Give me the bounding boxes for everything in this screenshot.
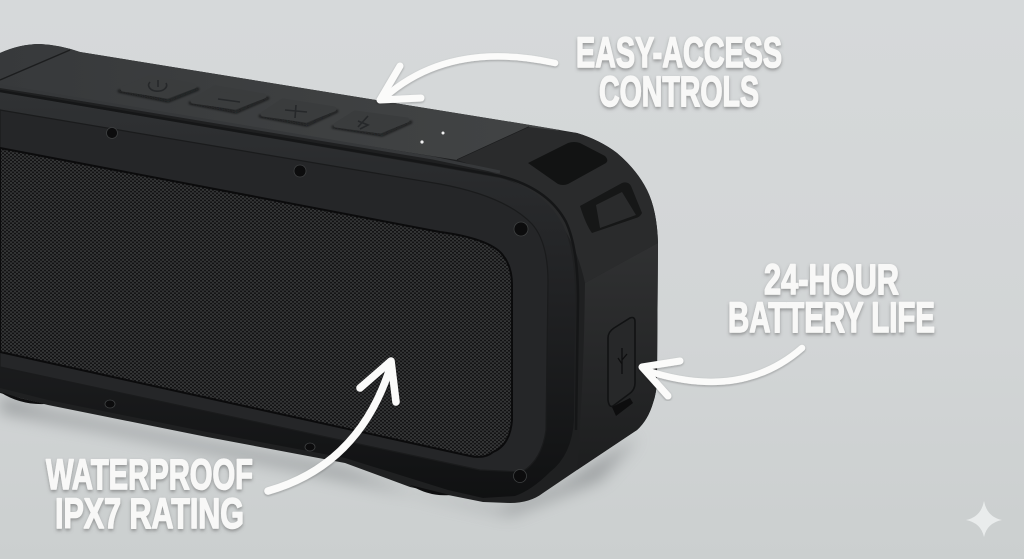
speaker body silhouette bbox=[0, 44, 658, 503]
power button bbox=[123, 78, 194, 96]
front frame bbox=[0, 92, 575, 498]
plus button bbox=[263, 101, 334, 120]
label: easy-access controls: CONTROLS bbox=[599, 68, 759, 116]
label: waterproof IPX7 rating: WATERPROOF bbox=[46, 451, 253, 499]
arrow: battery life bbox=[642, 348, 802, 396]
label: easy-access controls bbox=[576, 29, 782, 116]
right end cap bbox=[457, 127, 658, 283]
USB door tab bbox=[612, 398, 633, 416]
speaker grille bbox=[0, 148, 512, 457]
label: 24-hour battery life bbox=[728, 256, 935, 342]
inner bezel bbox=[0, 110, 548, 472]
icon: sparkle watermark bbox=[966, 501, 1002, 537]
screw bbox=[105, 128, 528, 482]
minus button bbox=[193, 88, 264, 107]
USB symbol bbox=[618, 348, 627, 374]
front ridge strip bbox=[0, 86, 500, 172]
speaker shadow on surface bbox=[0, 395, 640, 515]
top face bbox=[0, 44, 560, 160]
button shadow lines bbox=[119, 89, 411, 135]
top face seams bbox=[0, 50, 529, 160]
label: waterproof IPX7 rating: IPX7 RATING bbox=[55, 490, 244, 538]
handle inner ledge bbox=[596, 192, 636, 228]
USB port door bbox=[608, 318, 635, 406]
label: waterproof IPX7 rating bbox=[46, 451, 253, 538]
label: easy-access controls: EASY-ACCESS bbox=[576, 29, 782, 77]
handle opening upper bbox=[528, 142, 607, 185]
indicator lights bbox=[420, 132, 444, 144]
end side panel bbox=[577, 243, 658, 470]
rubber feet bbox=[0, 392, 450, 495]
arrow: waterproof rating bbox=[268, 361, 396, 491]
arrow: easy-access controls bbox=[380, 56, 555, 100]
speaker bbox=[0, 44, 658, 503]
button glyphs bbox=[149, 80, 368, 129]
label: 24-hour battery life: BATTERY LIFE bbox=[728, 294, 935, 342]
handle opening lower bbox=[580, 182, 642, 233]
bluetooth button bbox=[336, 113, 407, 131]
label: 24-hour battery life: 24-HOUR bbox=[764, 256, 899, 304]
